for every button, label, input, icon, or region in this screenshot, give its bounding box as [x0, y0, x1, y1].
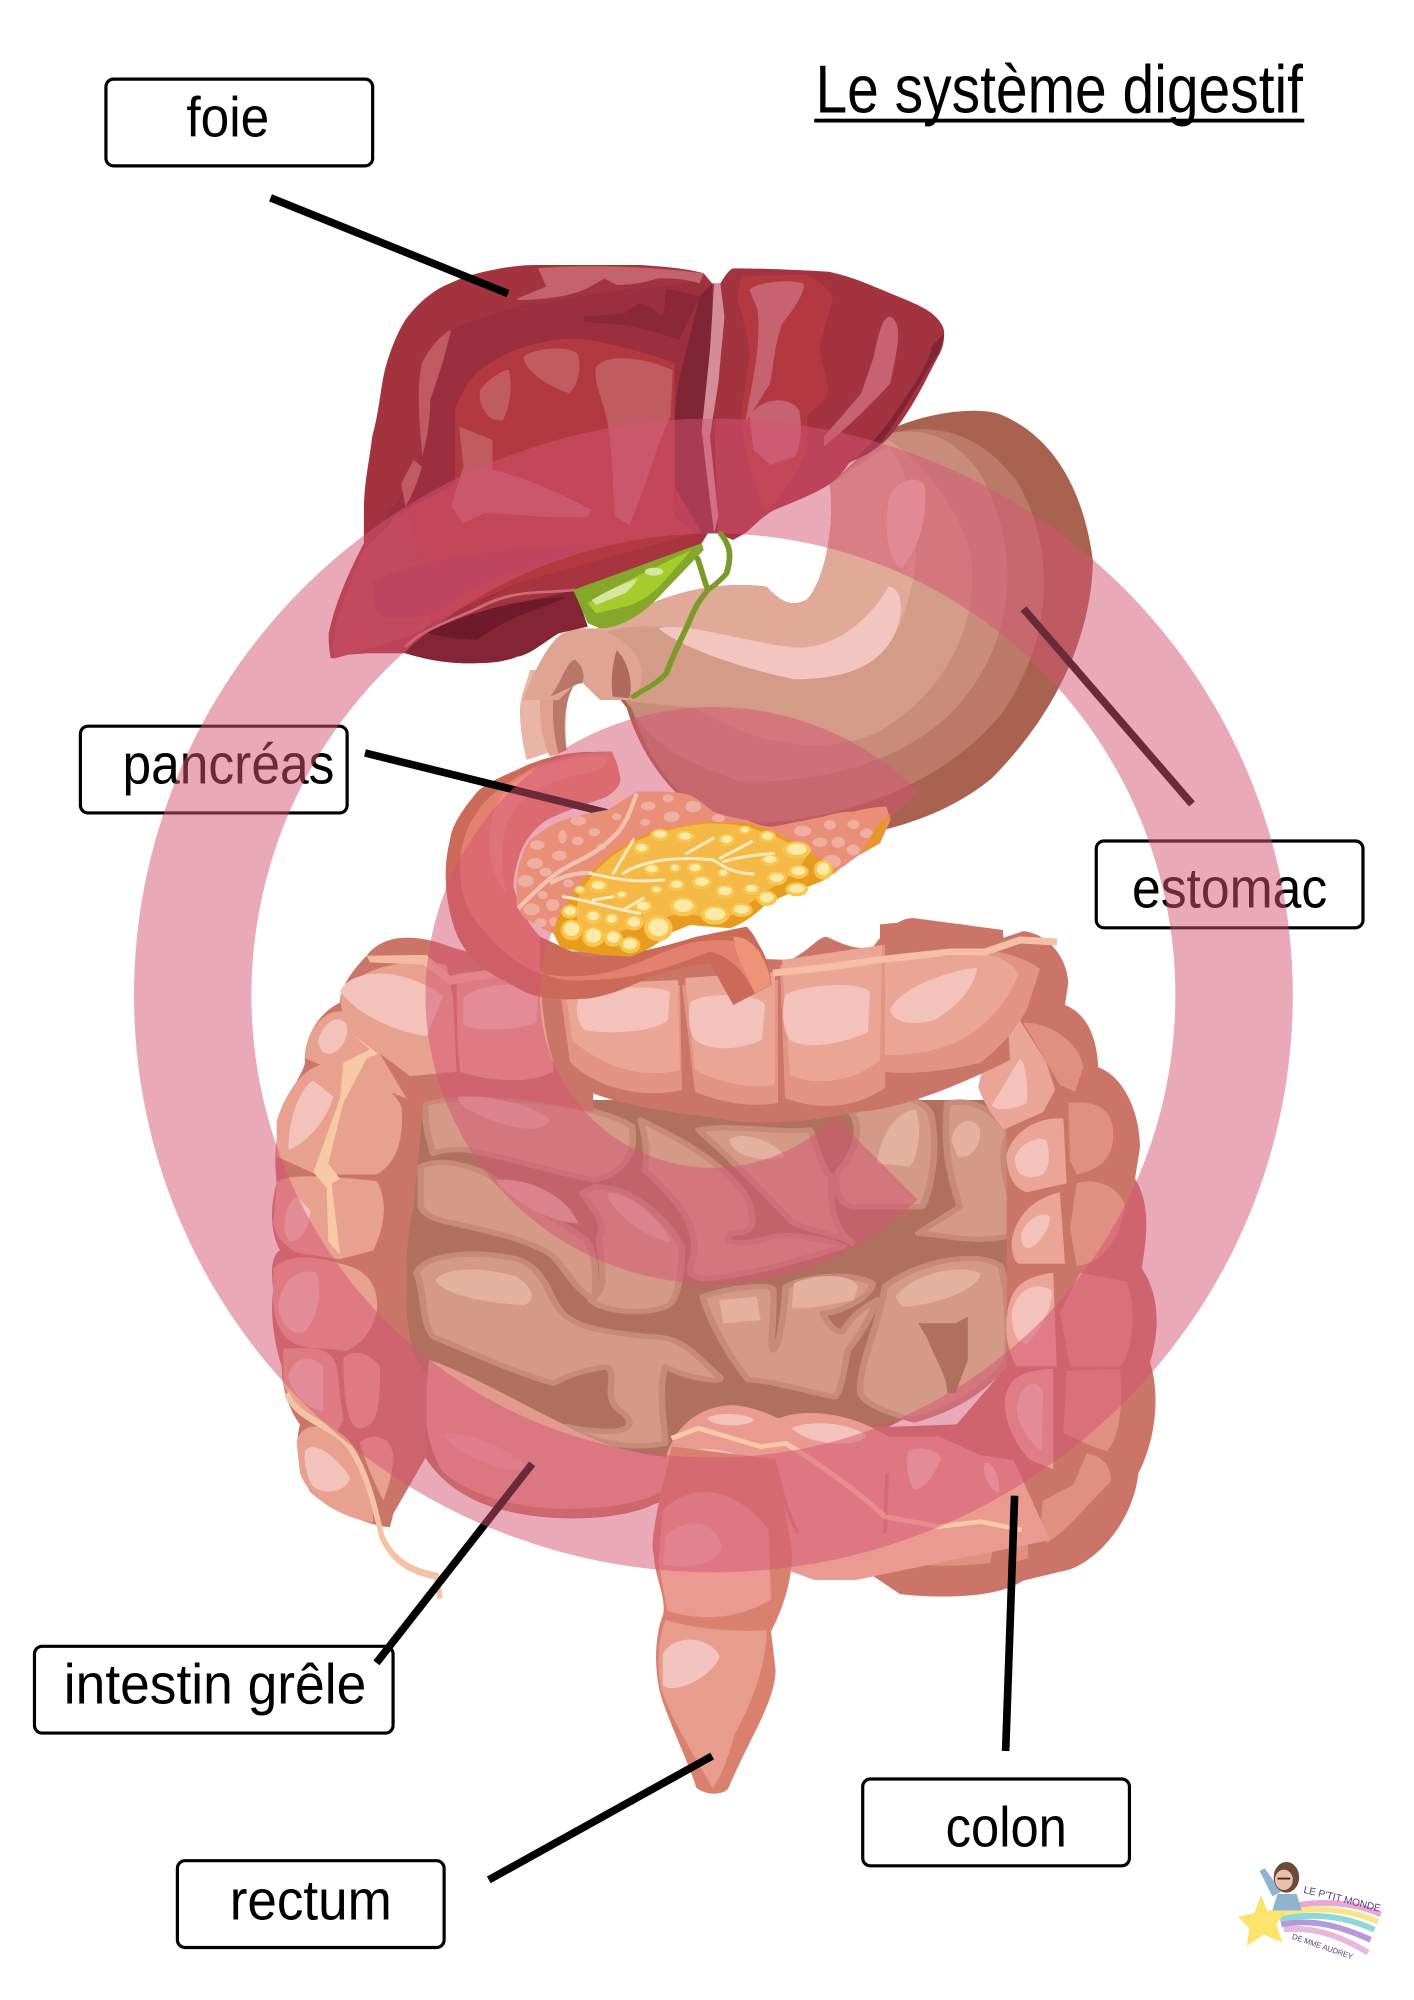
liver dark patch [584, 288, 700, 340]
label: colon [863, 1779, 1129, 1866]
gallbladder sac [573, 543, 704, 628]
transverse colon [540, 918, 1057, 1122]
liver rim line [405, 590, 575, 647]
right outer lobes [890, 1023, 1132, 1566]
lower intestine loop [425, 1360, 667, 1518]
stomach upper highlight [887, 480, 925, 568]
transverse lobes [560, 945, 1040, 1106]
sigmoid body [657, 1405, 1050, 1580]
label: intestin grêle: intestin grêle [64, 1653, 366, 1716]
stomach main [577, 440, 972, 745]
organ: gallbladder [573, 533, 730, 697]
label: foie: foie [186, 86, 269, 149]
rectum highlights [663, 1640, 720, 1688]
left colon silhouette [272, 938, 593, 1527]
gallbladder body [588, 550, 691, 613]
right inner lobes [978, 1020, 1067, 1469]
label: pancréas: pancréas [123, 733, 334, 796]
pancreas pink vessels [518, 793, 637, 908]
transverse taenia strip [773, 940, 1057, 973]
pancreas lobule centres [564, 827, 830, 949]
sigmoid highlights [680, 1414, 999, 1493]
logo: Le p'tit monde de Mme Audrey [1238, 1862, 1382, 1961]
liver silhouette [329, 265, 944, 663]
pancreas pink lobules [518, 793, 873, 927]
right colon highlights [992, 1058, 1052, 1451]
duodenum end [733, 937, 770, 993]
stomach band 3 [577, 432, 1007, 782]
liver dark inner [385, 280, 708, 617]
label: rectum: rectum [230, 1868, 392, 1931]
label: foie [106, 79, 373, 166]
duodenum inner [460, 752, 772, 993]
organ: pylorus and tube [520, 628, 642, 760]
pancreas orange body [553, 822, 837, 957]
label: colon: colon [946, 1796, 1067, 1859]
liver left highlights [419, 330, 451, 457]
organ: colon [272, 918, 1157, 1794]
bile duct [633, 533, 730, 697]
liver central column [675, 283, 718, 533]
label: estomac: estomac [1132, 856, 1327, 919]
pointer lines [271, 198, 1192, 1880]
liver right lobe highlights [745, 281, 898, 465]
organ: liver [329, 265, 944, 663]
title: Le système digestif [815, 52, 1303, 127]
logo avatar [1260, 1862, 1302, 1910]
left colon highlights [278, 974, 538, 1492]
loop rim [429, 1453, 665, 1518]
overlay: pink ring and spiral [134, 419, 1293, 1572]
organ: stomach [577, 411, 1093, 842]
rectum upper lobe [658, 1492, 771, 1617]
intestine highlights [435, 1096, 980, 1323]
rectum silhouette [653, 1446, 792, 1794]
right colon silhouette [833, 922, 1157, 1597]
top strip [367, 955, 493, 985]
label: pancréas [80, 726, 347, 813]
left taenia band [313, 1034, 378, 1255]
liver lower lobe [333, 510, 430, 658]
right colon [833, 922, 1157, 1597]
rectum lower lobe [659, 1620, 767, 1788]
stomach light band [577, 446, 916, 664]
duodenum highlight [489, 756, 607, 893]
pancreas veins [563, 838, 773, 913]
liver mid region [372, 338, 695, 627]
loop highlight [444, 1433, 528, 1470]
sigmoid taenia [671, 1428, 1022, 1530]
liver right edge dark [853, 333, 944, 460]
liver bottom rim [426, 533, 702, 627]
pyloric tube [520, 670, 587, 760]
pancreas pink part [517, 792, 891, 933]
label: rectum [177, 1861, 444, 1947]
transverse highlights [577, 968, 977, 1048]
stomach outer wall [577, 411, 1093, 842]
liver top highlight [517, 266, 704, 300]
label: estomac [1096, 841, 1363, 928]
pylorus folds [523, 628, 642, 700]
left colon [272, 938, 593, 1599]
intestine dark base [400, 1100, 1018, 1517]
transverse silhouette [540, 918, 1010, 1122]
gallbladder highlight [592, 578, 637, 605]
intestine lobes [417, 1098, 1018, 1446]
liver lower inner shade [372, 543, 600, 618]
label: intestin grêle [34, 1646, 393, 1733]
logo text top: LE P'TIT MONDE [1302, 1885, 1382, 1915]
pancreas lighter inner [577, 823, 807, 940]
liver left lobe highlights [451, 348, 673, 525]
duodenum silhouette [446, 752, 772, 1005]
logo star [1238, 1895, 1286, 1946]
transverse lighter lobes [565, 945, 1018, 1086]
liver underside dark [426, 597, 567, 640]
organ: small intestine [400, 1096, 1018, 1518]
sigmoid colon [657, 1405, 1050, 1580]
liver underside [405, 590, 588, 663]
stomach band 2 [577, 429, 1044, 823]
appendix strand [287, 1393, 440, 1599]
organ: duodenum [446, 752, 772, 1005]
left colon lobes [273, 962, 553, 1523]
logo rainbow [1280, 1903, 1381, 1953]
logo text bottom: DE MME AUDREY [1291, 1932, 1354, 1961]
inner Y crease [918, 1317, 968, 1393]
sigmoid fold shading [682, 1463, 887, 1537]
pancreas yellow lobule rims [561, 826, 833, 953]
liver right lobe bright [737, 275, 832, 513]
rectum [653, 1446, 792, 1794]
stomach highlight [658, 587, 901, 679]
organ: pancreas [517, 792, 891, 957]
pancreas tip orange [860, 813, 891, 853]
liver fissure [702, 283, 724, 533]
